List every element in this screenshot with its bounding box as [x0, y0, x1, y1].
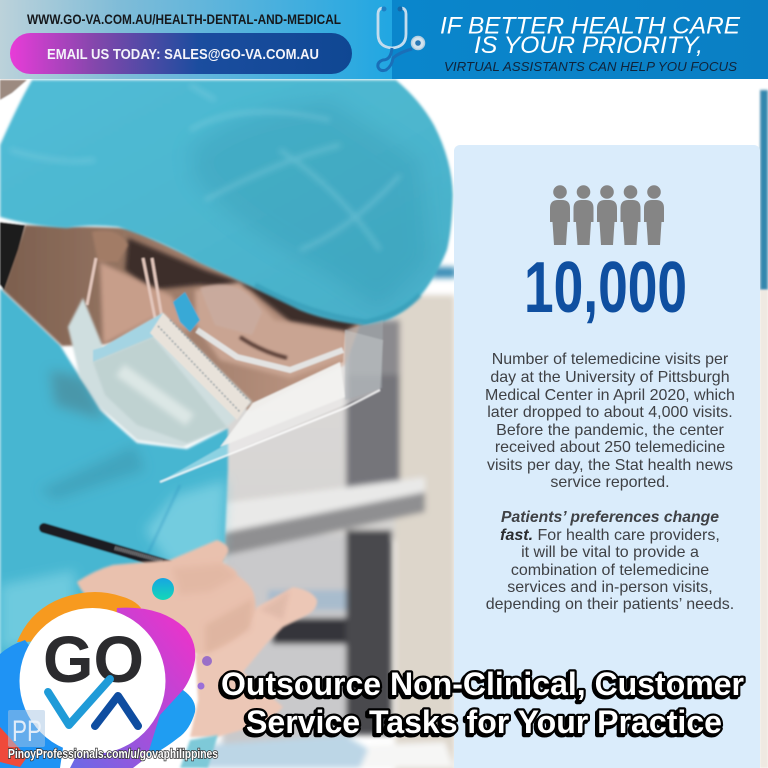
decorative dots — [152, 578, 212, 690]
surgical mask — [68, 298, 252, 447]
hands — [77, 540, 317, 737]
text block: patients' preferences — [486, 509, 734, 613]
text block: visits description: service reported. — [550, 474, 670, 491]
slogan — [440, 12, 741, 74]
watermark: PP badge — [8, 710, 45, 748]
slogan: IF BETTER HEALTH CARE — [440, 12, 741, 40]
headline: outsource tasks — [221, 666, 744, 740]
big number: 10,000 — [524, 248, 687, 328]
headline: outsource tasks: Outsource Non-Clinical, Customer — [221, 666, 744, 702]
text block: patients' preferences: services and in-person visits, — [507, 579, 713, 596]
logo wordmark GO: GO — [43, 622, 144, 696]
text block: visits description: day at the University of Pittsburgh — [490, 369, 730, 386]
glasses — [197, 330, 343, 370]
top-left skin patch — [0, 80, 27, 100]
right edge photo strip — [760, 90, 768, 290]
pen — [44, 528, 172, 566]
text block: visits description: Number of telemedicine visits per — [492, 351, 729, 368]
icon: group of five people — [550, 185, 664, 245]
headline: outsource tasks: Service Tasks for Your Practice — [246, 704, 722, 740]
email button — [10, 33, 352, 74]
header banner — [0, 0, 768, 79]
icon: stethoscope — [378, 6, 424, 71]
text block: visits description: later dropped to about 4,000 visits. — [487, 404, 733, 421]
text block: patients' preferences: depending on their patients’ needs. — [486, 596, 734, 613]
mask straps — [87, 258, 162, 318]
slogan: VIRTUAL ASSISTANTS CAN HELP YOU FOCUS — [444, 59, 737, 74]
text block: patients' preferences: Patients’ preferences change — [501, 509, 719, 526]
text block: visits description: Before the pandemic, the center — [496, 422, 725, 439]
cap — [0, 80, 453, 325]
text block: patients' preferences: fast. For health care providers, — [500, 527, 720, 544]
panel: telemedicine statistic — [454, 145, 760, 768]
text block: visits description: visits per day, the Stat health news — [487, 457, 733, 474]
text block: visits description — [485, 351, 735, 491]
text block: visits description: received about 250 telemedicine — [495, 439, 725, 456]
text block: visits description: Medical Center in April 2020, which — [485, 387, 735, 404]
website url: WWW.GO-VA.COM.AU/HEALTH-DENTAL-AND-MEDICAL — [27, 12, 341, 27]
face shield — [160, 330, 383, 482]
logo mark VA — [48, 679, 138, 726]
gown — [0, 288, 228, 670]
neck and face — [3, 225, 360, 412]
text block: patients' preferences: it will be vital to provide a — [521, 544, 699, 561]
logo: GO VA — [0, 592, 195, 768]
watermark: PP badge: PP — [12, 715, 42, 748]
blurred clinic background — [205, 267, 456, 768]
watermark: site url: PinoyProfessionals.com/u/govaphilippines — [8, 747, 218, 761]
slogan: IS YOUR PRIORITY, — [474, 32, 703, 59]
email button: EMAIL US TODAY: SALES@GO-VA.COM.AU — [47, 47, 319, 63]
text block: patients' preferences: combination of telemedicine — [511, 562, 709, 579]
